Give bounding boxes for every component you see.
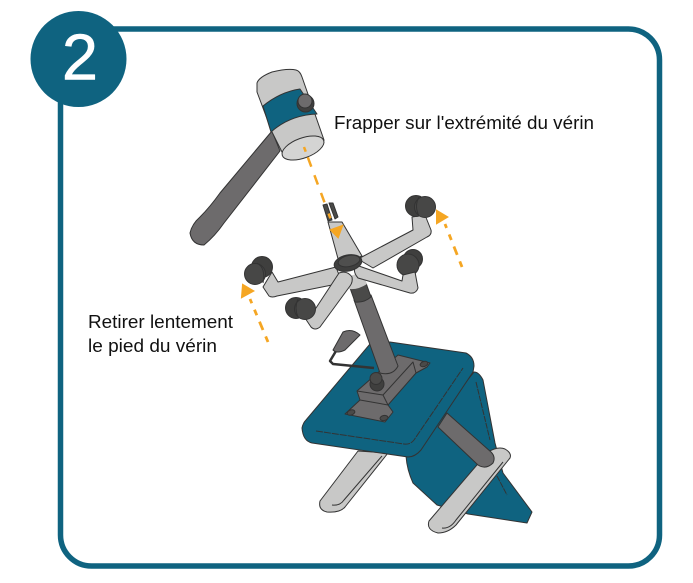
arm: left xyxy=(244,256,342,297)
lever grip xyxy=(333,331,360,352)
label: hammer instruction: Frapper sur l'extrémité du vérin xyxy=(334,113,594,133)
mount knob xyxy=(370,372,384,391)
hammer handle xyxy=(190,131,280,245)
arrow: hammer strike xyxy=(304,147,342,237)
top tube clips xyxy=(323,203,338,221)
arrow: left foot xyxy=(242,285,268,342)
arrow: right foot xyxy=(437,211,462,267)
arm: lower left xyxy=(286,272,352,329)
icon: hammer xyxy=(190,69,327,245)
label: foot instruction xyxy=(88,312,233,356)
panel frame xyxy=(60,29,660,566)
seat back panel xyxy=(406,372,532,523)
seat panel xyxy=(302,342,474,457)
skid inner lines xyxy=(332,456,503,528)
mount plate and box xyxy=(345,355,430,422)
skid: rear xyxy=(428,448,510,533)
arm: upper right xyxy=(358,196,436,268)
seat back inner line xyxy=(476,382,507,495)
hammer knob xyxy=(297,94,314,112)
hammer band xyxy=(263,89,317,132)
post shaft xyxy=(354,295,398,374)
hammer face xyxy=(279,131,327,165)
step number badge xyxy=(30,11,126,107)
label: foot instruction: Retirer lentement xyxy=(88,312,233,332)
crossbar xyxy=(438,413,494,467)
lever rod xyxy=(330,351,374,368)
skid: front xyxy=(320,451,388,512)
star base xyxy=(244,196,436,329)
light collar under hub xyxy=(344,272,367,289)
chair base xyxy=(302,342,532,533)
lever xyxy=(330,331,374,368)
step number badge: 2 xyxy=(62,20,98,94)
top tube xyxy=(328,222,362,266)
mount holes xyxy=(346,360,429,421)
arm: right lower xyxy=(354,250,422,293)
seat edge line xyxy=(316,368,463,444)
mount box edges xyxy=(357,362,416,405)
hub xyxy=(333,252,363,274)
hammer head xyxy=(257,69,324,158)
gas cylinder post xyxy=(350,283,398,374)
label: foot instruction: le pied du vérin xyxy=(88,336,217,356)
post collar xyxy=(350,283,371,302)
seat mount xyxy=(345,355,430,422)
